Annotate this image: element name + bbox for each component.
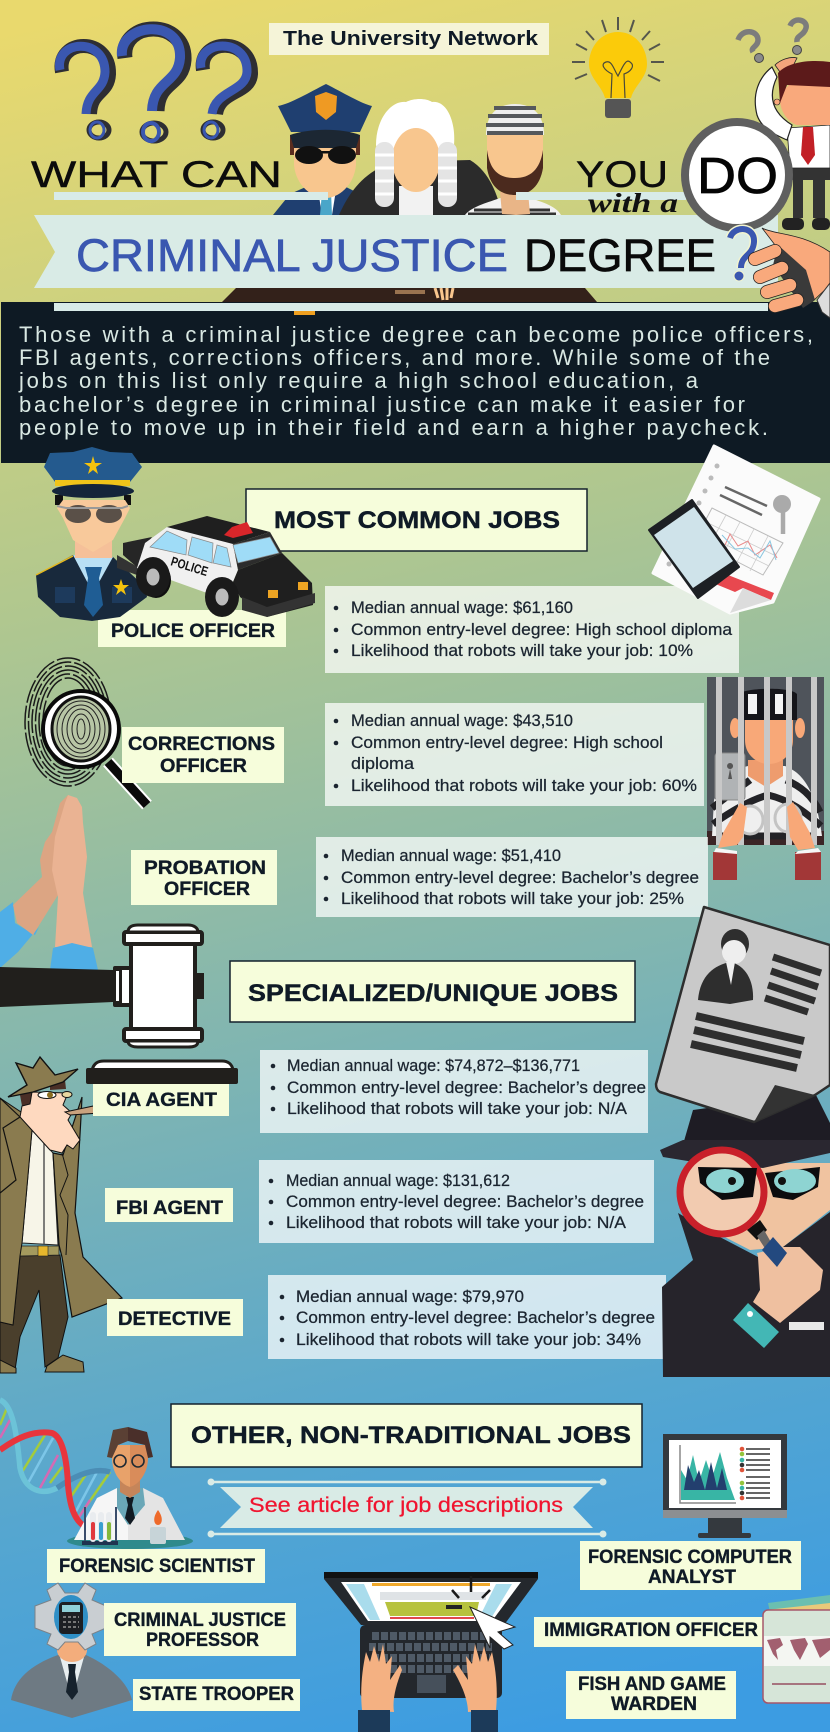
illustration: police car — [117, 516, 315, 617]
illustration: prisoner — [465, 104, 561, 215]
heading: what can you do: YOU — [576, 154, 668, 195]
icon: magnifying glass with DO: DO — [697, 147, 778, 204]
label: state trooper — [133, 1679, 300, 1711]
label: corrections officer: OFFICER — [160, 756, 247, 777]
label: probation officer: PROBATION — [144, 858, 266, 879]
source label: The University Network: The University Network — [283, 28, 539, 50]
ribbon: see article for job descriptions — [208, 1478, 606, 1538]
ribbon: see article for job descriptions: See article for job descriptions — [249, 1494, 563, 1517]
illustration: hand holding magnifier — [755, 228, 830, 318]
icon: magnifying glass with DO — [685, 122, 789, 228]
heading: what can you do: WHAT CAN — [31, 154, 282, 195]
illustration: spy with magnifying glass — [660, 1093, 830, 1377]
panel: FBI agent facts: Common entry-level degree: Bachelor’s degree — [286, 1193, 644, 1211]
label: probation officer: OFFICER — [164, 879, 250, 900]
label: detective: DETECTIVE — [118, 1309, 231, 1330]
label: forensic scientist: FORENSIC SCIENTIST — [59, 1556, 255, 1577]
label: fish and game warden — [566, 1671, 736, 1719]
panel: corrections officer facts: Common entry-level degree: High school — [351, 734, 663, 752]
label: fish and game warden: FISH AND GAME — [578, 1674, 726, 1695]
label: forensic computer analyst: FORENSIC COMPUTER — [588, 1547, 792, 1568]
panel: police officer facts — [325, 586, 739, 673]
panel: corrections officer facts: diploma — [351, 755, 415, 773]
panel: introduction: people to move up in their field and earn a higher paycheck. — [19, 415, 768, 440]
label: CIA agent — [93, 1084, 229, 1116]
panel: police officer facts: Common entry-level degree: High school diploma — [351, 621, 733, 639]
illustration: trench coat detective — [0, 1057, 122, 1373]
illustration: computer monitor with chart — [663, 1434, 787, 1538]
illustration: laptop with hands and cursor — [324, 1572, 538, 1732]
panel: detective facts: Likelihood that robots will take your job: 34% — [296, 1331, 641, 1349]
panel: CIA agent facts — [260, 1050, 648, 1133]
icon: light bulb — [572, 17, 664, 118]
panel: police officer facts: Likelihood that robots will take your job: 10% — [351, 642, 693, 660]
panel: probation officer facts: Likelihood that robots will take your job: 25% — [341, 890, 684, 908]
label: probation officer — [131, 850, 277, 905]
illustration: police officer — [273, 84, 372, 215]
panel: CIA agent facts: Common entry-level degree: Bachelor’s degree — [287, 1079, 646, 1097]
icon: three question marks — [60, 29, 251, 141]
label: state trooper: STATE TROOPER — [139, 1684, 294, 1705]
panel: corrections officer facts: Likelihood that robots will take your job: 60% — [351, 777, 697, 795]
illustration: gavel — [0, 925, 238, 1084]
illustration: thinking man with question marks — [738, 20, 830, 230]
illustration: police car: POLICE — [169, 554, 210, 579]
label: forensic computer analyst: ANALYST — [648, 1567, 736, 1588]
panel: corrections officer facts: Median annual wage: $43,510 — [351, 712, 573, 730]
label: forensic scientist — [47, 1549, 265, 1583]
illustration: forensic scientist — [67, 1427, 193, 1549]
panel: CIA agent facts: Median annual wage: $74,872–$136,771 — [287, 1057, 580, 1075]
panel: specialized jobs heading: SPECIALIZED/UNIQUE JOBS — [248, 980, 618, 1007]
panel: probation officer facts: Median annual wage: $51,410 — [341, 847, 561, 865]
panel: specialized jobs heading — [230, 961, 635, 1022]
illustration: document with phone — [649, 446, 819, 613]
label: detective — [107, 1299, 243, 1336]
label: police officer: POLICE OFFICER — [111, 621, 275, 642]
source label: The University Network — [269, 23, 549, 55]
panel: introduction: jobs on this list only require a high school education, a — [18, 368, 699, 393]
panel: FBI agent facts: Median annual wage: $131,612 — [286, 1172, 510, 1190]
illustration: high five hands — [0, 795, 98, 970]
panel: introduction: bachelor’s degree in criminal justice can make it easier for — [19, 392, 745, 417]
heading: what can you do — [31, 154, 668, 195]
panel: police officer facts: Median annual wage: $61,160 — [351, 599, 573, 617]
label: forensic computer analyst — [580, 1541, 801, 1590]
illustration: prisoner behind bars — [707, 677, 824, 880]
illustration: DNA helix — [0, 1400, 110, 1526]
label: immigration officer: IMMIGRATION OFFICER — [544, 1620, 758, 1641]
illustration: man with gear head — [11, 1583, 132, 1718]
panel: probation officer facts: Common entry-level degree: Bachelor’s degree — [341, 869, 699, 887]
panel: introduction: Those with a criminal justice degree can become police officers, — [19, 322, 813, 347]
panel: most common jobs heading: MOST COMMON JOBS — [274, 507, 560, 534]
script text: with a: with a — [588, 188, 678, 218]
panel: corrections officer facts — [325, 703, 704, 806]
decorative strip left — [54, 192, 328, 200]
label: FBI agent: FBI AGENT — [116, 1198, 223, 1219]
icon: blue question mark — [730, 229, 754, 281]
panel: FBI agent facts — [259, 1160, 654, 1243]
title banner: criminal justice degree: DEGREE — [524, 230, 716, 281]
illustration: judge desk — [222, 288, 597, 302]
label: fish and game warden: WARDEN — [611, 1694, 697, 1715]
label: corrections officer — [122, 727, 284, 783]
title banner: criminal justice degree — [34, 215, 778, 288]
panel: detective facts: Common entry-level degree: Bachelor’s degree — [296, 1309, 655, 1327]
panel: probation officer facts — [316, 837, 708, 917]
panel: other jobs heading — [171, 1404, 642, 1467]
panel: detective facts: Median annual wage: $79,970 — [296, 1288, 524, 1306]
panel: CIA agent facts: Likelihood that robots will take your job: N/A — [287, 1100, 627, 1118]
illustration: judge — [339, 99, 502, 215]
panel: FBI agent facts: Likelihood that robots will take your job: N/A — [286, 1214, 626, 1232]
illustration: passport — [763, 1595, 830, 1703]
label: corrections officer: CORRECTIONS — [128, 734, 275, 755]
label: criminal justice professor: CRIMINAL JUSTICE — [114, 1610, 286, 1631]
label: criminal justice professor: PROFESSOR — [146, 1630, 259, 1651]
label: immigration officer — [534, 1617, 768, 1647]
label: criminal justice professor — [104, 1603, 296, 1656]
panel: introduction — [1, 302, 830, 463]
label: CIA agent: CIA AGENT — [106, 1090, 217, 1111]
label: police officer — [98, 610, 286, 647]
illustration: police officer bust — [36, 447, 147, 621]
icon: magnifier over fingerprint — [43, 691, 147, 805]
label: FBI agent — [105, 1188, 233, 1222]
panel: other jobs heading: OTHER, NON-TRADITIONAL JOBS — [191, 1422, 631, 1449]
decorative strip right — [516, 192, 686, 200]
illustration: resume document — [656, 907, 830, 1122]
panel: introduction: FBI agents, corrections officers, and more. While some of the — [19, 345, 770, 370]
panel: detective facts — [268, 1275, 666, 1359]
icon: fingerprint — [25, 658, 111, 786]
title banner: criminal justice degree: CRIMINAL JUSTICE — [76, 230, 508, 281]
panel: most common jobs heading — [246, 489, 587, 551]
